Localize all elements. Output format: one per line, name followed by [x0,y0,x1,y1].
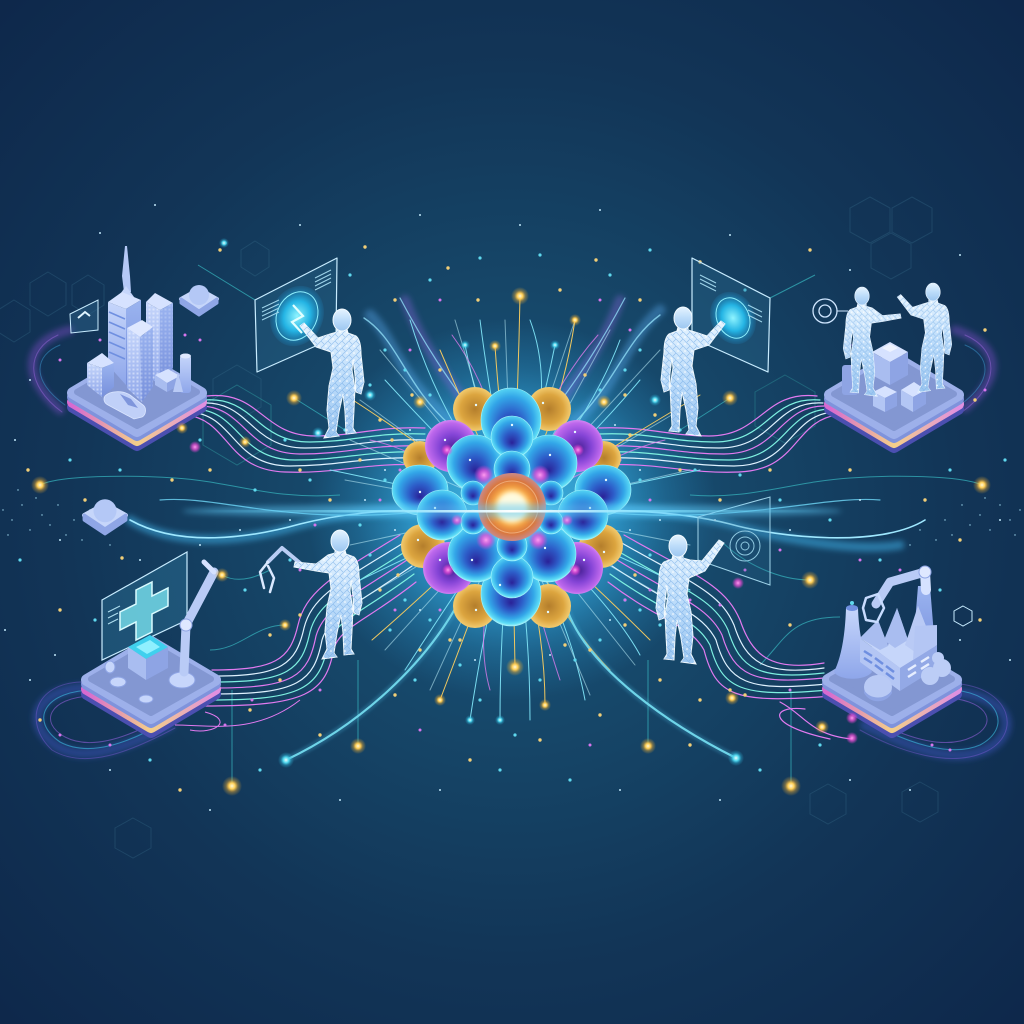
glowing gold nodes [31,287,991,796]
icon: floating device top [181,285,217,315]
core bloom [496,491,528,523]
icon: hologram orb [702,284,764,352]
horizontal energy swooshes [130,499,925,547]
wave bundle: top left [186,395,425,472]
cyan particles [20,243,1005,780]
ring: bottom left [36,682,175,759]
faint hexagon grid [0,197,938,858]
figure pair [843,283,952,396]
small hexagon icon [954,606,972,626]
icon: floating device left [84,499,126,534]
equipment nodes [105,661,195,703]
figure: bottom left person [294,530,362,659]
teal screen box [128,635,168,680]
side dust [3,490,1020,545]
central sphere cluster [392,387,631,628]
pink nodes [189,441,858,744]
panel: faint screen lower right [698,497,770,585]
chimney left [834,601,872,679]
outer blue spheres [392,388,631,626]
platform: collaboration [830,283,958,447]
icon: hologram orb [260,277,334,355]
platform: factory [828,566,972,732]
particles [3,205,1020,810]
magenta glints [441,444,584,576]
big cube [872,342,908,385]
car [104,392,146,419]
radiating fibres [330,296,700,720]
robot arm platform [180,562,214,672]
icon: robot arm gripper [260,548,300,592]
small block [87,353,114,397]
sphere sparkles [418,403,606,612]
long cyan curves to bottom nodes [286,600,736,760]
panel: small chart top left [70,300,98,333]
panel: holographic screen top right [692,258,770,372]
ring: top left [32,330,70,412]
platform: medical [87,562,215,732]
purple spheres [423,420,603,594]
ring: bottom right [860,684,1007,758]
figure: top right person [661,307,725,436]
rocks [921,652,951,685]
robot arm factory [863,566,931,622]
swirl rings around platforms [32,330,1007,759]
dome tank [864,675,892,701]
orange core [478,473,546,541]
figure: bottom right person [656,535,724,664]
icon: round badge top right [813,299,848,323]
figure: top left person [300,309,364,438]
core ring [486,481,538,533]
wave bundle: top right [599,395,838,472]
white-blue small particles [5,205,1010,810]
panel: medical cross screen [102,552,187,660]
inner blue spheres [461,416,563,598]
wave bundle: bottom right [608,535,852,739]
top plumes [364,298,660,425]
gold particles [28,247,985,790]
low building and silo [155,354,191,393]
panel: holographic screen top left [255,258,337,372]
ring: top right [955,330,992,412]
wave bundle: bottom left [205,535,416,706]
chimney right [912,586,936,660]
pink purple particles [60,300,985,750]
tall tower [108,246,141,385]
factory building [860,606,937,691]
front tower [127,320,153,402]
platform: city [73,246,201,445]
small blocks [842,365,926,412]
glowing cyan nodes [219,238,744,768]
gold spheres [401,387,623,628]
right tower [146,293,173,385]
central glow [307,320,717,700]
horizontal lens flare [182,504,842,518]
thin circuit lines to gold nodes [40,265,982,786]
extra bundle tails lower left [175,700,300,731]
